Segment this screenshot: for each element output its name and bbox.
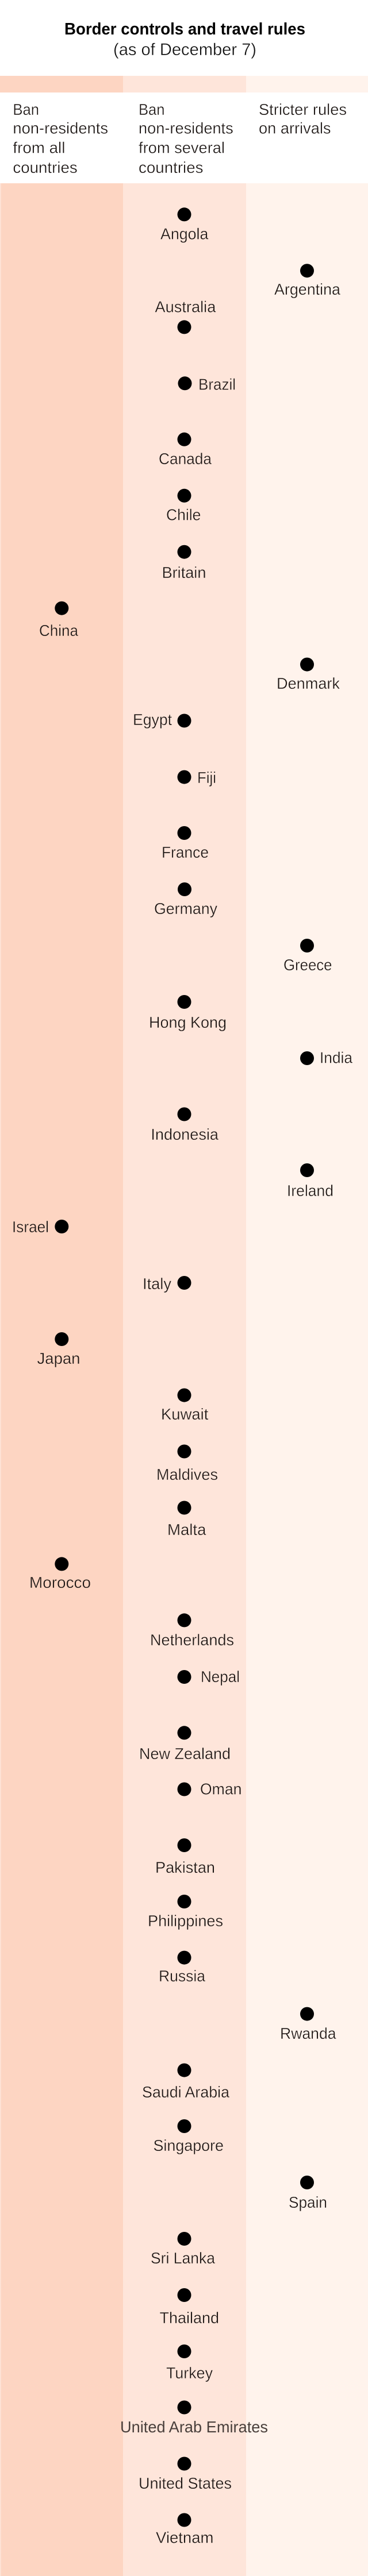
marker: Denmark: Denmark <box>277 674 340 692</box>
column heading: ban non-residents from all countries: non-residents <box>13 119 108 137</box>
marker: China: China <box>39 622 78 639</box>
marker: Thailand <box>160 2288 219 2327</box>
marker: Maldives: Maldives <box>156 1466 218 1483</box>
column heading: ban non-residents from several countries: Ban <box>139 101 164 118</box>
marker: France <box>162 826 209 861</box>
marker: Morocco: Morocco <box>29 1574 91 1591</box>
marker: United States: United States <box>139 2474 232 2492</box>
marker: Turkey <box>166 2344 213 2382</box>
marker: Pakistan <box>155 1838 215 1876</box>
marker: Israel <box>12 1218 68 1236</box>
marker: Singapore <box>153 2119 224 2154</box>
column heading: ban non-residents from several countries <box>139 101 233 176</box>
marker: Oman: Oman <box>200 1780 241 1798</box>
marker: Indonesia: Indonesia <box>151 1125 218 1143</box>
marker: Angola: Angola <box>160 225 209 243</box>
marker: Oman <box>177 1780 241 1798</box>
marker: Chile: Chile <box>166 506 201 524</box>
marker: Greece: Greece <box>283 956 332 974</box>
marker: Italy: Italy <box>143 1275 171 1293</box>
marker: Vietnam: Vietnam <box>156 2529 213 2546</box>
marker: Russia <box>159 1951 205 1985</box>
marker: India: India <box>320 1049 352 1066</box>
band: ban from several countries <box>123 76 246 92</box>
marker: Chile <box>166 489 201 524</box>
marker: Pakistan: Pakistan <box>155 1858 215 1876</box>
marker: Australia <box>155 298 216 334</box>
marker: Greece <box>283 939 332 974</box>
marker: Angola <box>160 207 209 243</box>
column heading: ban non-residents from several countries: countries <box>139 159 204 176</box>
marker: Sri Lanka <box>151 2232 215 2267</box>
marker: Fiji <box>177 769 216 786</box>
marker: Saudi Arabia <box>142 2064 229 2101</box>
marker: Spain: Spain <box>289 2193 327 2211</box>
column heading: ban non-residents from all countries: Ban <box>13 101 39 118</box>
title block <box>64 20 305 59</box>
panel: stricter rules column background <box>246 183 368 2576</box>
marker: China <box>39 601 78 639</box>
marker: Brazil: Brazil <box>198 376 236 394</box>
marker: Germany <box>154 882 217 917</box>
marker: Morocco <box>29 1557 91 1591</box>
marker: Germany: Germany <box>154 900 217 917</box>
marker: Canada: Canada <box>159 450 212 468</box>
marker: France: France <box>162 843 209 861</box>
marker: Argentina: Argentina <box>274 280 340 298</box>
marker: Rwanda <box>280 2007 336 2042</box>
markers: stricter rules on arrivals <box>274 264 352 2211</box>
marker: Sri Lanka: Sri Lanka <box>151 2249 215 2267</box>
markers: ban from all countries <box>12 601 91 1591</box>
marker: India <box>300 1049 352 1066</box>
marker: Netherlands: Netherlands <box>150 1631 234 1649</box>
panel: ban from all countries column background <box>0 183 123 2576</box>
marker: Argentina <box>274 264 340 298</box>
marker: Israel: Israel <box>12 1218 49 1236</box>
column heading: ban non-residents from all countries: from all <box>13 139 65 157</box>
marker: Saudi Arabia: Saudi Arabia <box>142 2083 229 2101</box>
column heading: stricter rules on arrivals: Stricter rules <box>259 101 347 118</box>
marker: Italy <box>143 1275 191 1293</box>
marker: Australia: Australia <box>155 298 216 315</box>
marker: United Arab Emirates: United Arab Emirates <box>120 2418 268 2436</box>
column heading: ban non-residents from several countries: non-residents <box>139 119 233 137</box>
marker: New Zealand <box>139 1726 231 1763</box>
band: ban from all countries <box>0 76 123 92</box>
marker: Nepal: Nepal <box>201 1668 240 1686</box>
marker: Philippines: Philippines <box>148 1912 223 1930</box>
marker: Malta: Malta <box>167 1521 206 1538</box>
band: stricter rules <box>246 76 368 92</box>
panel: ban from several countries column background <box>123 183 246 2576</box>
column heading: stricter rules on arrivals: on arrivals <box>259 119 331 137</box>
marker: Fiji: Fiji <box>197 769 216 786</box>
marker: Hong Kong: Hong Kong <box>149 1013 227 1031</box>
marker: Spain <box>289 2176 327 2211</box>
marker: Denmark <box>277 658 340 692</box>
subtitle: (as of December 7) <box>113 40 256 59</box>
column heading: ban non-residents from all countries: countries <box>13 159 78 176</box>
marker: Egypt: Egypt <box>133 711 172 728</box>
marker: Brazil <box>178 376 236 394</box>
marker: New Zealand: New Zealand <box>139 1745 231 1763</box>
marker: Britain: Britain <box>162 564 206 581</box>
marker: Indonesia <box>151 1108 218 1143</box>
marker: Malta <box>167 1501 206 1538</box>
marker: Japan: Japan <box>37 1349 80 1367</box>
marker: Hong Kong <box>149 995 227 1031</box>
markers: ban from several countries <box>120 207 268 2546</box>
marker: Turkey: Turkey <box>166 2364 213 2382</box>
column heading: ban non-residents from all countries <box>13 101 108 176</box>
marker: Canada <box>159 433 212 468</box>
marker: Ireland <box>287 1163 334 1200</box>
marker: Japan <box>37 1332 80 1367</box>
marker: Ireland: Ireland <box>287 1182 334 1200</box>
marker: United Arab Emirates <box>120 2400 268 2436</box>
marker: United States <box>139 2457 232 2492</box>
column heading: stricter rules on arrivals <box>259 101 347 137</box>
marker: Russia: Russia <box>159 1967 205 1985</box>
marker: Vietnam <box>156 2513 213 2546</box>
marker: Thailand: Thailand <box>160 2309 219 2327</box>
colour key band <box>0 76 368 92</box>
marker: Maldives <box>156 1444 218 1483</box>
marker: Singapore: Singapore <box>153 2137 224 2154</box>
marker: Philippines <box>148 1895 223 1930</box>
marker: Nepal <box>177 1668 240 1686</box>
column heading: ban non-residents from several countries: from several <box>139 139 225 157</box>
marker: Britain <box>162 545 206 581</box>
marker: Rwanda: Rwanda <box>280 2024 336 2042</box>
title: Border controls and travel rules <box>64 20 305 38</box>
marker: Kuwait: Kuwait <box>161 1405 209 1423</box>
marker: Kuwait <box>161 1389 209 1423</box>
marker: Netherlands <box>150 1613 234 1649</box>
